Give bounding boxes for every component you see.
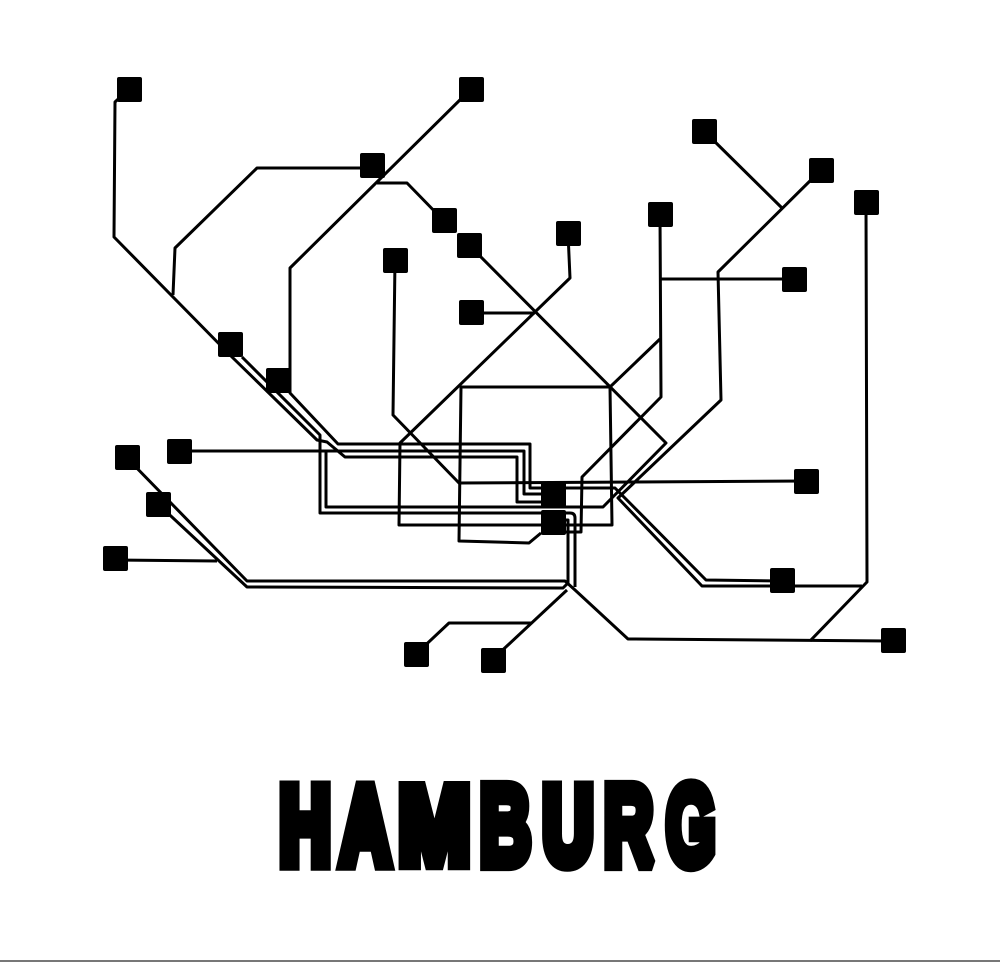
station [432, 208, 457, 233]
station markers [103, 77, 906, 673]
station [854, 190, 879, 215]
station [770, 568, 795, 593]
station [459, 300, 484, 325]
title: A [340, 766, 390, 887]
line: north diagonal through bundle [290, 89, 782, 581]
transit line network [114, 89, 893, 659]
title: M [398, 764, 470, 886]
line: short spur to centre station [471, 312, 535, 314]
line: second bundle strand to lower crossing [242, 357, 575, 587]
line: south-west lower strand [158, 504, 568, 588]
line: branch from upper station into north-west trunk [173, 168, 372, 295]
title: U [543, 765, 593, 887]
station [881, 628, 906, 653]
station [481, 648, 506, 673]
title [280, 762, 716, 890]
line: west spur [115, 560, 217, 561]
station [115, 445, 140, 470]
title: R [604, 762, 653, 889]
station [457, 233, 482, 258]
station [360, 153, 385, 178]
line: southern station branch [493, 590, 567, 659]
line: rectangular central loop [399, 233, 612, 543]
station [117, 77, 142, 102]
title: H [280, 766, 330, 887]
station [809, 158, 834, 183]
station [146, 492, 171, 517]
station: central lower [541, 510, 566, 535]
line: far east vertical [810, 202, 867, 641]
station [167, 439, 192, 464]
line: centre north station to east station [393, 260, 806, 483]
line: connector from north-centre line to loop corner [610, 339, 660, 387]
station [648, 202, 673, 227]
title: B [480, 763, 531, 890]
station [103, 546, 128, 571]
line: east branch [661, 278, 794, 280]
station [383, 248, 408, 273]
line: short spur to upper centre station [377, 183, 444, 221]
line: south-east long line [127, 458, 893, 641]
station [692, 119, 717, 144]
station [782, 267, 807, 292]
station [266, 368, 291, 393]
line: loop around centre via south-east corner [326, 245, 666, 507]
station [459, 77, 484, 102]
title: G [666, 763, 716, 889]
station: central upper [541, 482, 566, 507]
station [218, 332, 243, 357]
station [404, 642, 429, 667]
station [556, 221, 581, 246]
line: north-east station via long diagonal [618, 170, 862, 586]
line: west station to central [179, 451, 553, 494]
station [794, 469, 819, 494]
line: north-centre station down to central hub [553, 215, 661, 532]
bottom border line [0, 960, 1000, 962]
line: north-west branch to central station [114, 89, 553, 502]
line: southern second branch [416, 623, 532, 654]
line: north-east fork [704, 131, 782, 208]
